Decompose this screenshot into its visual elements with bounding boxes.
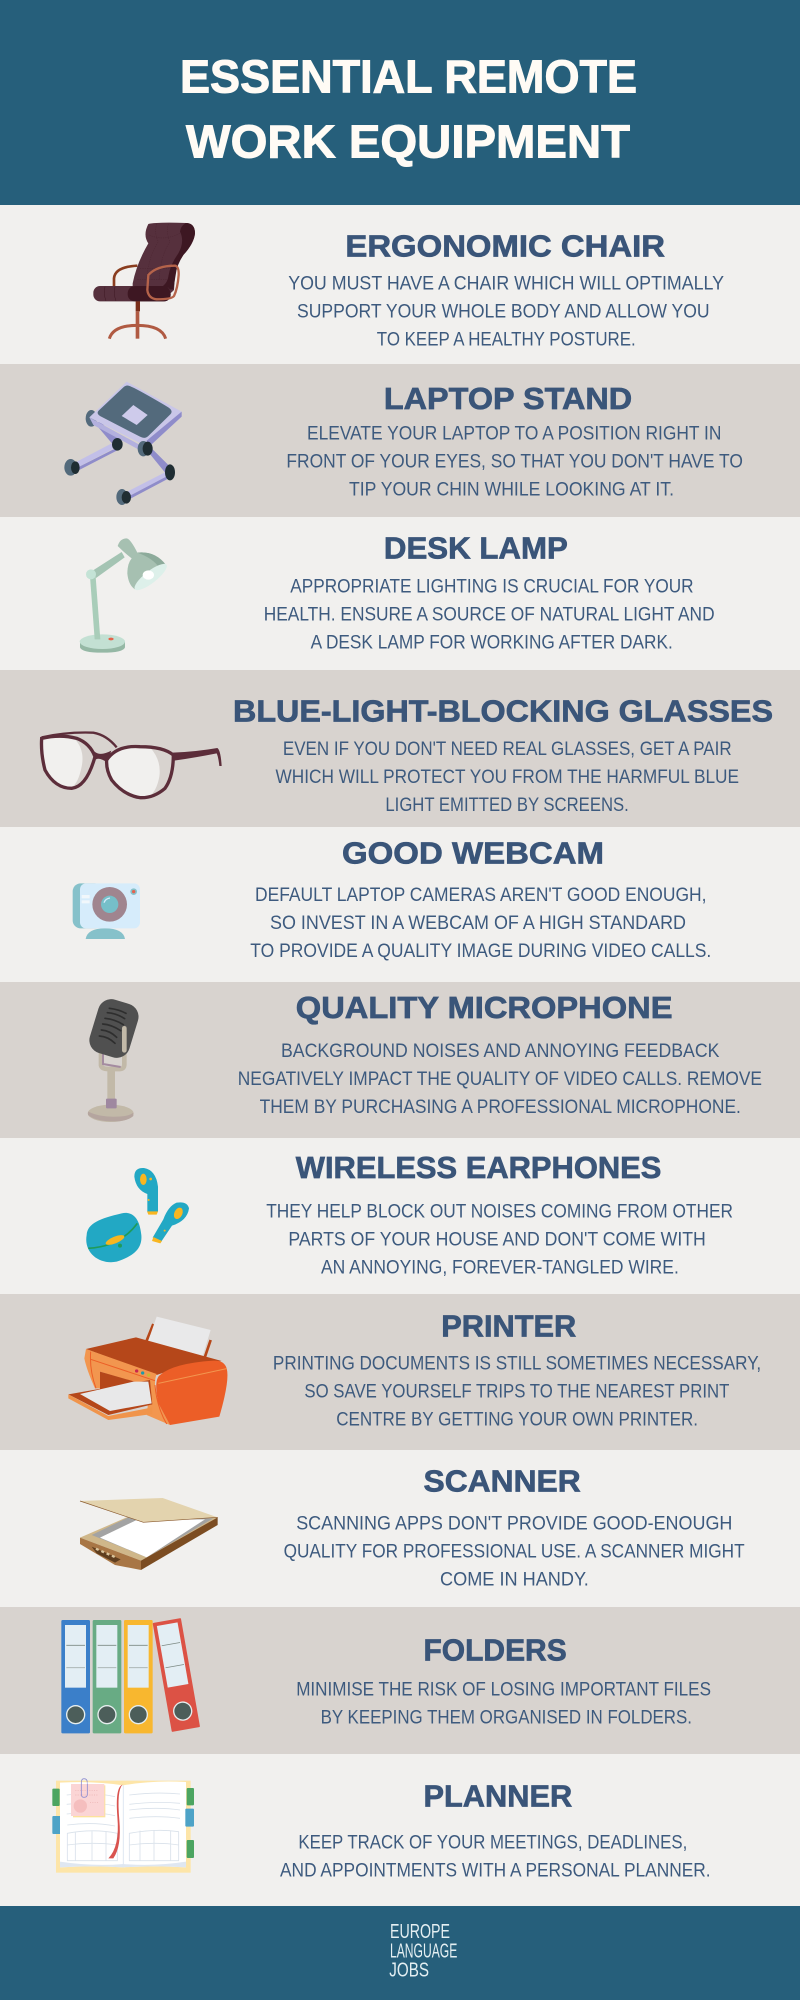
text block: SCANNING APPS DON'T PROVIDE GOOD-ENOUGH: [296, 1512, 732, 1534]
text block: SUPPORT YOUR WHOLE BODY AND ALLOW YOU: [297, 300, 710, 322]
logo: Europe Language Jobs: EUROPE: [390, 1921, 450, 1943]
icon: microphone: [86, 996, 142, 1122]
text block: QUALITY FOR PROFESSIONAL USE. A SCANNER MIGHT: [284, 1540, 745, 1562]
heading: GOOD WEBCAM: [342, 836, 604, 871]
text block: THEY HELP BLOCK OUT NOISES COMING FROM OTHER: [266, 1200, 733, 1222]
panel: planner: [0, 1754, 800, 1906]
text block: PARTS OF YOUR HOUSE AND DON'T COME WITH: [288, 1228, 706, 1250]
text block: DEFAULT LAPTOP CAMERAS AREN'T GOOD ENOUGH,: [255, 884, 706, 906]
icon: scanner: [80, 1498, 218, 1570]
icon: folders: [61, 1618, 200, 1733]
heading: PLANNER: [424, 1779, 572, 1814]
text block: [286, 422, 743, 500]
text block: TO KEEP A HEALTHY POSTURE.: [377, 328, 636, 350]
text block: [266, 1200, 733, 1278]
text block: [250, 884, 711, 962]
text block: MINIMISE THE RISK OF LOSING IMPORTANT FILES: [296, 1678, 711, 1700]
text block: THEM BY PURCHASING A PROFESSIONAL MICROPHONE.: [260, 1096, 741, 1118]
text block: BACKGROUND NOISES AND ANNOYING FEEDBACK: [281, 1040, 719, 1062]
text block: EVEN IF YOU DON'T NEED REAL GLASSES, GET A PAIR: [283, 738, 732, 760]
text block: [273, 1352, 761, 1430]
panel: quality microphone: [0, 982, 800, 1138]
text block: AND APPOINTMENTS WITH A PERSONAL PLANNER.: [280, 1859, 711, 1881]
logo: Europe Language Jobs: [389, 1921, 457, 1982]
title: [180, 51, 637, 168]
icon: planner: [52, 1779, 194, 1873]
heading: BLUE-LIGHT-BLOCKING GLASSES: [233, 693, 773, 728]
heading: QUALITY MICROPHONE: [296, 990, 672, 1025]
panel: ergonomic chair: [0, 205, 800, 364]
icon: printer: [68, 1317, 227, 1425]
text block: A DESK LAMP FOR WORKING AFTER DARK.: [311, 631, 673, 653]
heading: LAPTOP STAND: [384, 381, 632, 416]
text block: LIGHT EMITTED BY SCREENS.: [385, 794, 629, 816]
logo: Europe Language Jobs: JOBS: [389, 1960, 429, 1982]
heading: ERGONOMIC CHAIR: [345, 229, 665, 264]
text block: [264, 575, 715, 653]
text block: YOU MUST HAVE A CHAIR WHICH WILL OPTIMALLY: [288, 272, 724, 294]
text block: SO INVEST IN A WEBCAM OF A HIGH STANDARD: [270, 912, 686, 934]
heading: WIRELESS EARPHONES: [296, 1150, 661, 1185]
title: WORK EQUIPMENT: [186, 116, 630, 168]
heading: FOLDERS: [424, 1633, 567, 1668]
icon: desk lamp: [80, 538, 170, 653]
text block: [288, 272, 724, 350]
text block: SO SAVE YOURSELF TRIPS TO THE NEAREST PRINT: [304, 1380, 729, 1402]
icon: webcam: [73, 883, 140, 939]
text block: HEALTH. ENSURE A SOURCE OF NATURAL LIGHT AND: [264, 603, 715, 625]
text block: BY KEEPING THEM ORGANISED IN FOLDERS.: [321, 1706, 692, 1728]
icon: glasses: [41, 733, 222, 798]
text block: TIP YOUR CHIN WHILE LOOKING AT IT.: [349, 478, 674, 500]
panel: laptop stand: [0, 364, 800, 517]
text block: [284, 1512, 745, 1590]
text block: CENTRE BY GETTING YOUR OWN PRINTER.: [336, 1408, 698, 1430]
icon: laptop stand: [64, 382, 182, 505]
text block: [238, 1040, 762, 1118]
icon: earphones: [86, 1168, 189, 1262]
text block: FRONT OF YOUR EYES, SO THAT YOU DON'T HAVE TO: [286, 450, 743, 472]
title: ESSENTIAL REMOTE: [180, 51, 637, 103]
panel: blue-light-blocking glasses: [0, 670, 800, 827]
panel: scanner: [0, 1450, 800, 1607]
panel: good webcam: [0, 827, 800, 982]
header band: [0, 0, 800, 205]
text block: KEEP TRACK OF YOUR MEETINGS, DEADLINES,: [298, 1831, 687, 1853]
logo: Europe Language Jobs: LANGUAGE: [390, 1941, 457, 1963]
panel: printer: [0, 1294, 800, 1450]
text block: APPROPRIATE LIGHTING IS CRUCIAL FOR YOUR: [290, 575, 694, 597]
text block: WHICH WILL PROTECT YOU FROM THE HARMFUL BLUE: [276, 766, 739, 788]
text block: ELEVATE YOUR LAPTOP TO A POSITION RIGHT IN: [307, 422, 721, 444]
text block: AN ANNOYING, FOREVER-TANGLED WIRE.: [321, 1256, 679, 1278]
icon: chair: [93, 223, 195, 339]
panel: wireless earphones: [0, 1138, 800, 1294]
text block: [296, 1678, 711, 1728]
text block: [276, 738, 739, 816]
text block: COME IN HANDY.: [440, 1568, 589, 1590]
text block: TO PROVIDE A QUALITY IMAGE DURING VIDEO CALLS.: [250, 940, 711, 962]
heading: DESK LAMP: [384, 531, 568, 566]
panel: folders: [0, 1607, 800, 1754]
text block: [280, 1831, 711, 1881]
panel: desk lamp: [0, 517, 800, 670]
footer band: [0, 1906, 800, 2000]
heading: PRINTER: [441, 1308, 576, 1343]
heading: SCANNER: [424, 1464, 581, 1499]
